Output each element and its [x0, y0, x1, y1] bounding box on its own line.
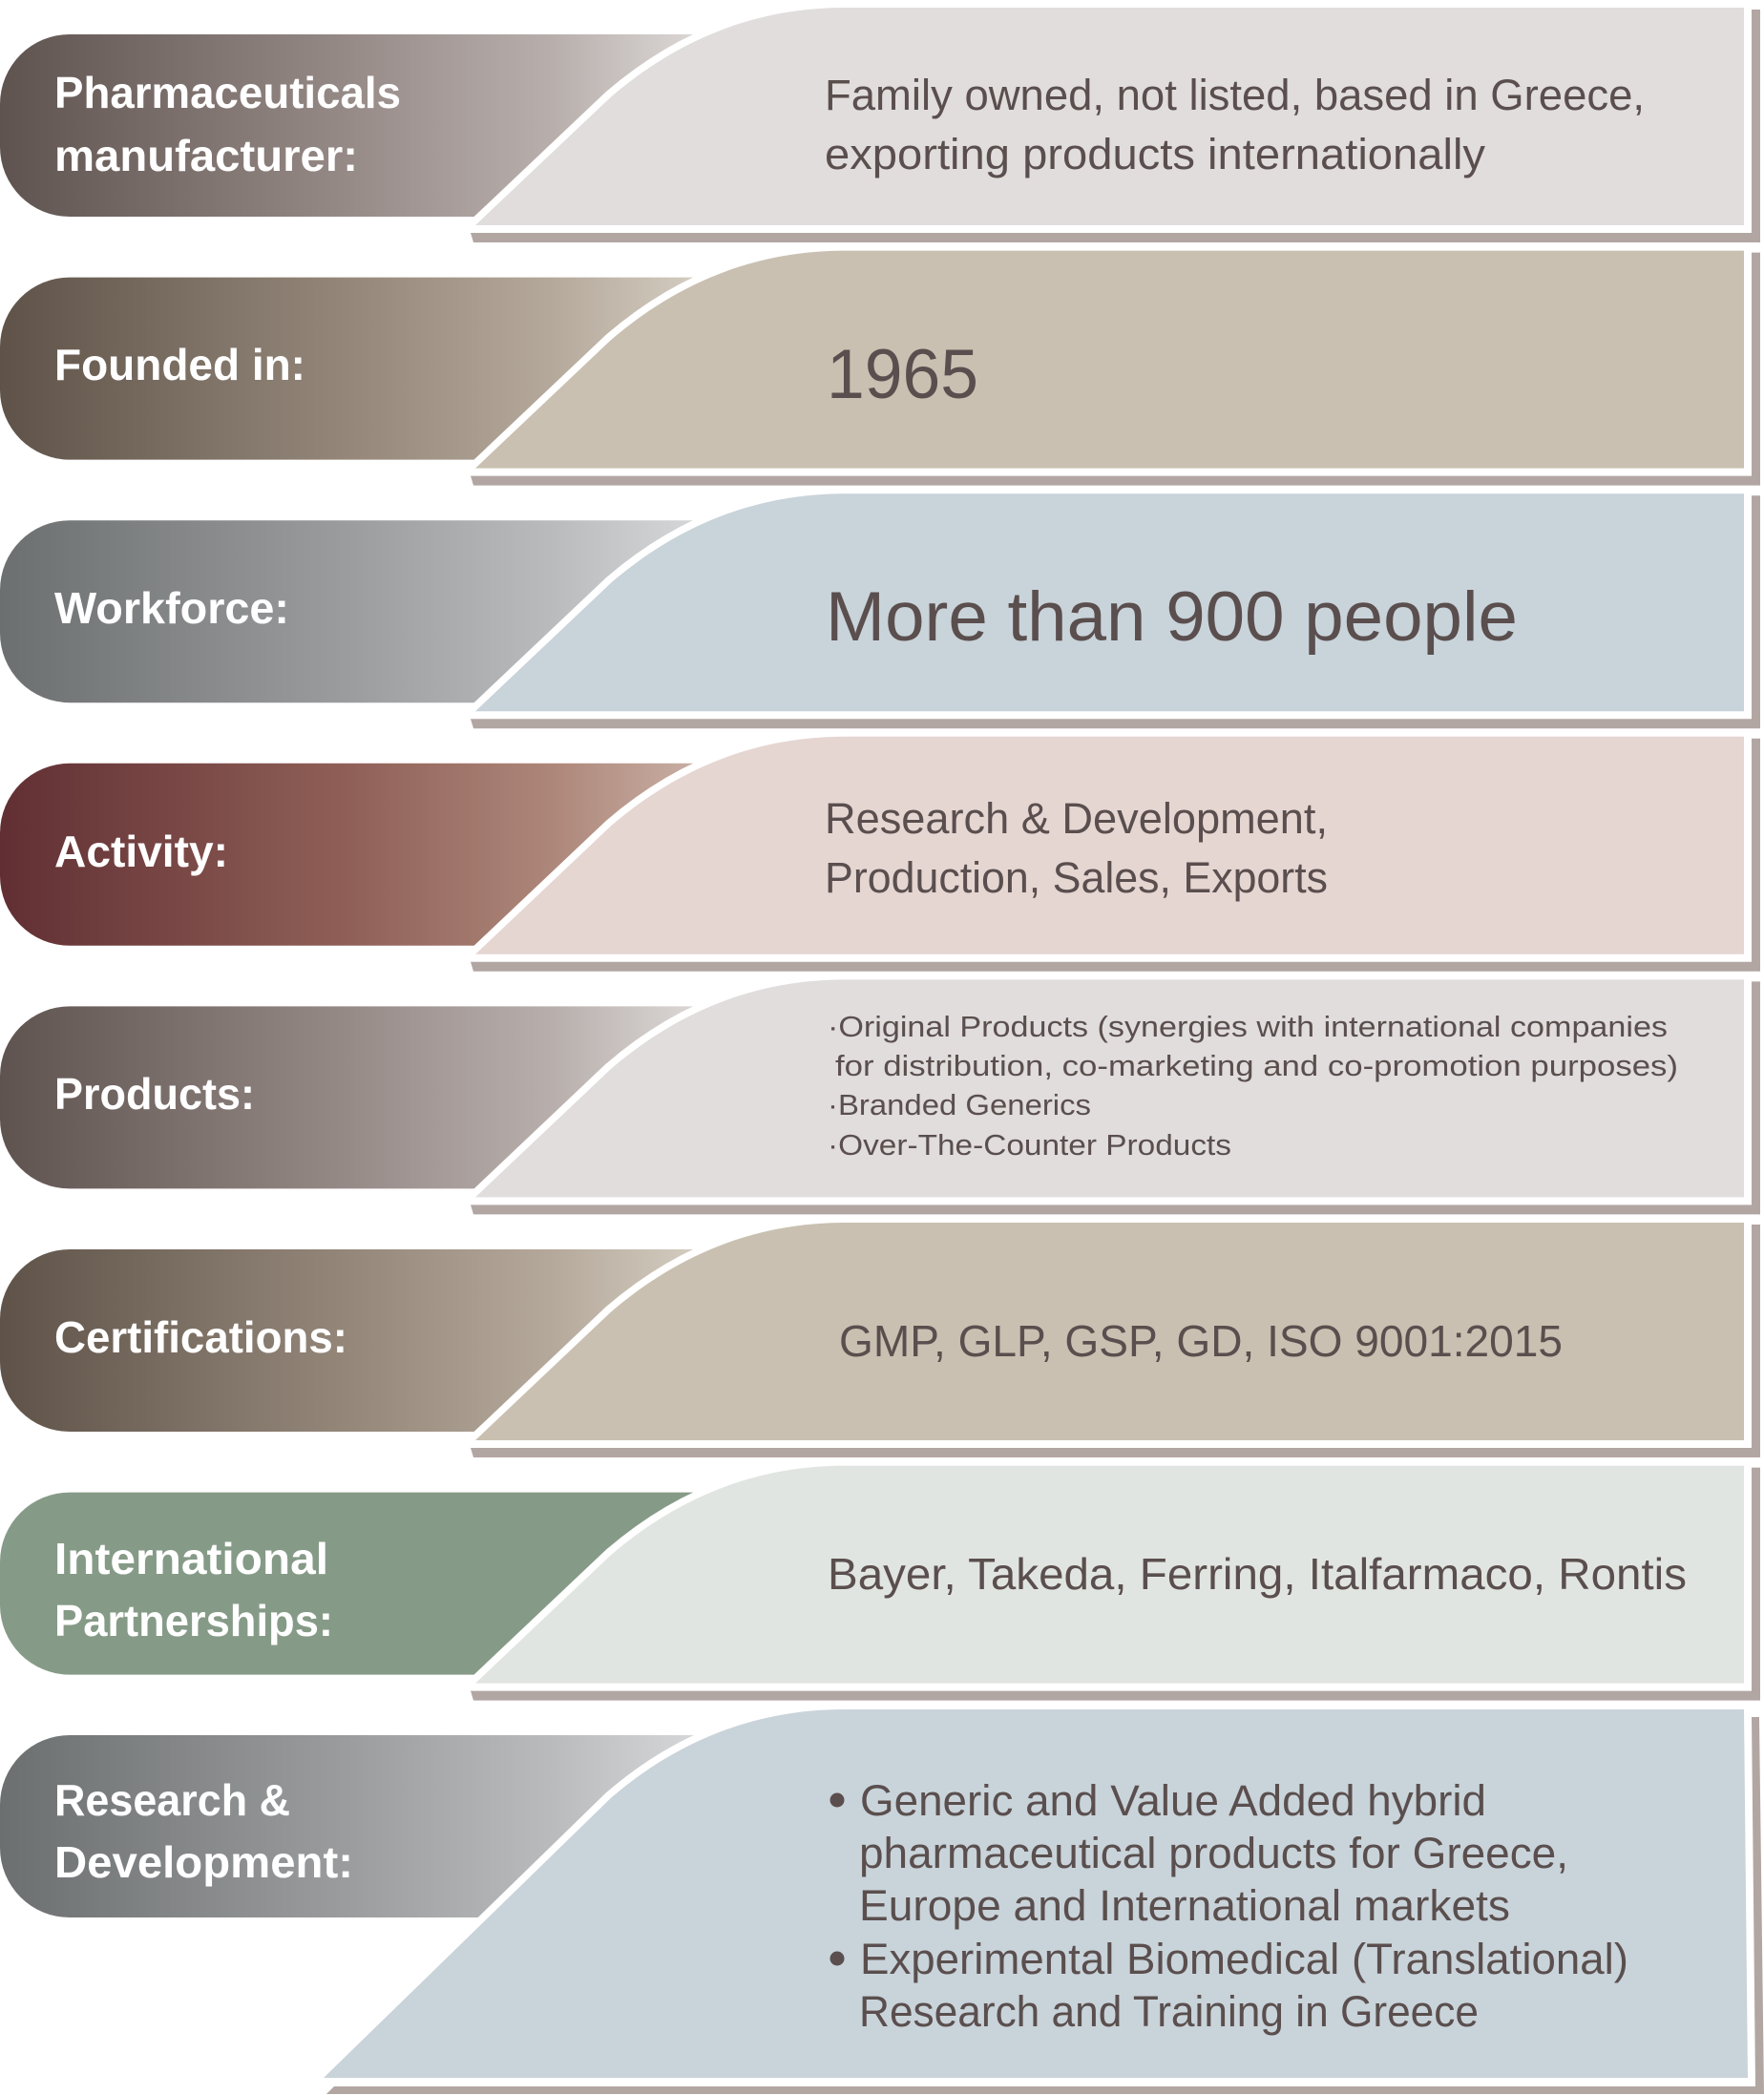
row: founded in [0, 251, 1760, 486]
panel: research and development [324, 1709, 1748, 2078]
panel shadow [471, 1225, 1760, 1457]
label text [54, 1534, 333, 1645]
body text: Production, Sales, Exports [825, 853, 1328, 902]
panel shadow [326, 1717, 1764, 2094]
body text: product list [828, 1010, 1678, 1162]
body text: R&D list: Generic and Value Added hybrid [860, 1776, 1486, 1825]
panel: international partnerships [475, 1466, 1744, 1684]
label text: manufacturer: [54, 131, 358, 180]
body text: headcount: More than 900 people [826, 578, 1518, 656]
label pill: activity [0, 764, 764, 946]
panel: certifications [475, 1223, 1744, 1440]
label pill: products [0, 1006, 764, 1188]
body text: product list: ·Over-The-Counter Products [828, 1128, 1231, 1162]
panel shadow [471, 981, 1760, 1214]
body text: GMP, GLP, GSP, GD, ISO 9001:2015 [839, 1316, 1563, 1366]
body text: Bayer, Takeda, Ferring, Italfarmaco, Rontis [828, 1549, 1687, 1599]
row: research and development [0, 1709, 1764, 2094]
label text [54, 68, 401, 180]
row: workforce [0, 493, 1760, 728]
row: certifications [0, 1223, 1760, 1457]
label text: Workforce: [54, 583, 289, 633]
panel: products [475, 979, 1744, 1197]
panel shadow [471, 739, 1760, 972]
body text: R&D list: pharmaceutical products for Greece, [859, 1829, 1568, 1877]
label text: Activity: [54, 827, 228, 876]
label text: Products: [54, 1069, 255, 1119]
row: activity [0, 737, 1760, 972]
label pill: certifications [0, 1249, 764, 1432]
label text [54, 1775, 353, 1887]
panel shadow [471, 253, 1760, 486]
panel: activity [475, 737, 1744, 954]
label pill: founded in [0, 278, 764, 460]
body text: R&D list: Research and Training in Greece [859, 1987, 1479, 2036]
body text: R&D list: Europe and International markets [859, 1881, 1510, 1930]
label text: Development: [54, 1837, 353, 1887]
body text [825, 71, 1645, 178]
panel shadow [471, 1468, 1760, 1701]
label pill: international partnerships [0, 1493, 764, 1675]
body text: Family owned, not listed, based in Greece, [825, 71, 1645, 119]
panel: workforce [475, 493, 1744, 711]
panel: pharmaceuticals manufacturer [475, 8, 1744, 225]
body text: year: 1965 [827, 336, 978, 413]
panel shadow [471, 10, 1760, 242]
row: international partnerships [0, 1466, 1760, 1701]
label text: Pharmaceuticals [54, 68, 401, 117]
panel shadow [471, 495, 1760, 728]
body text: R&D list: Experimental Biomedical (Translational) [860, 1935, 1628, 1983]
label text: Partnerships: [54, 1596, 333, 1645]
label text: International [54, 1534, 328, 1583]
body text [825, 794, 1328, 902]
body text: product list: for distribution, co-marketing and co-promotion purposes) [835, 1049, 1678, 1082]
label pill: pharmaceuticals manufacturer [0, 34, 764, 217]
label pill: research and development [0, 1735, 764, 1917]
label pill: workforce [0, 520, 764, 702]
row: pharmaceuticals manufacturer [0, 8, 1760, 242]
body text: R&D list [859, 1776, 1628, 2036]
bullet: second item [830, 1951, 844, 1966]
label text: Research & [54, 1775, 290, 1825]
body text: exporting products internationally [825, 130, 1486, 178]
body text: Research & Development, [825, 794, 1328, 843]
panel: founded in [475, 251, 1744, 469]
row: products [0, 979, 1760, 1214]
label text: Certifications: [54, 1312, 347, 1362]
body text: product list: ·Original Products (synergies with international companies [828, 1010, 1668, 1043]
bullet: first item [830, 1792, 844, 1808]
label text: Founded in: [54, 340, 305, 389]
body text: product list: ·Branded Generics [828, 1088, 1091, 1121]
